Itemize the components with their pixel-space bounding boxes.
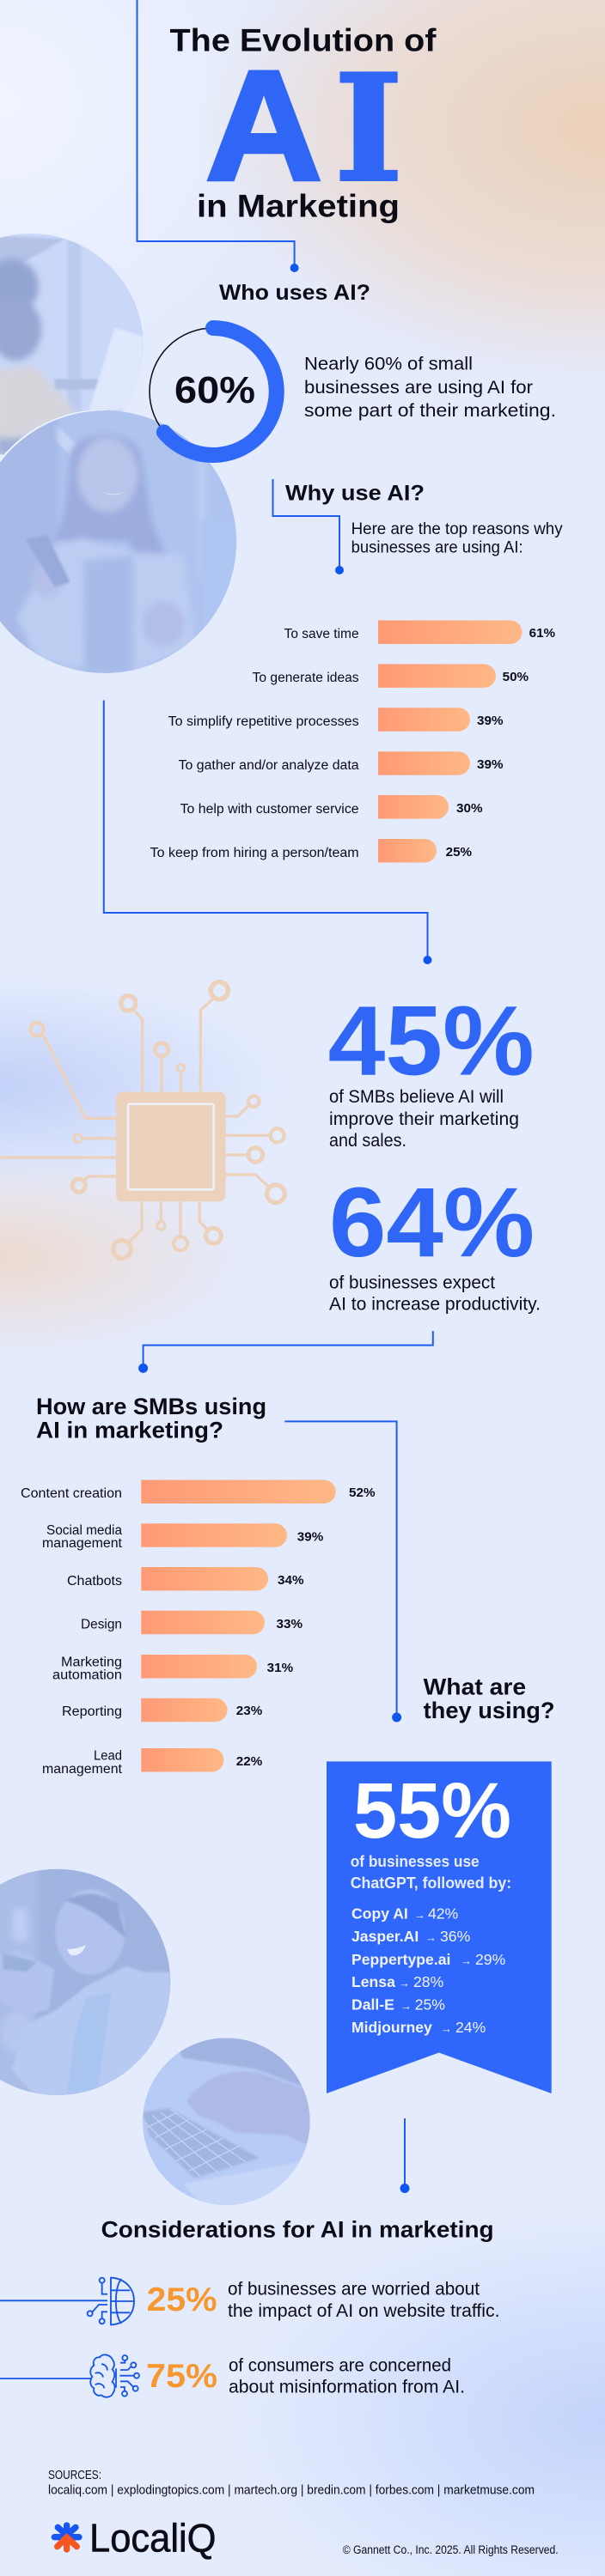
- sources: localiq.com | explodingtopics.com | martech.org | bredin.com | forbes.com | marketmuse.com: [48, 2483, 535, 2497]
- bar: chatbots: [67, 1567, 304, 1590]
- bar: gather data: To gather and/or analyze data: [179, 758, 359, 773]
- icon: brain circuit: [0, 2354, 139, 2397]
- section: how SMBs use AI: [21, 1394, 375, 1777]
- bar: social media: [42, 1523, 323, 1551]
- bar: gather data: [179, 751, 504, 775]
- heading: what are they using: [424, 1674, 555, 1723]
- tool list: →: [441, 2022, 452, 2035]
- sources: SOURCES:: [48, 2468, 101, 2482]
- bar: chatbots: 34%: [278, 1573, 304, 1588]
- logo: LocaliQ: [54, 2516, 217, 2561]
- bar: marketing automation: 31%: [267, 1661, 293, 1675]
- stat: 45%: 45%: [328, 986, 535, 1096]
- bar: generate ideas: 50%: [503, 670, 529, 684]
- intro text: businesses are using AI:: [351, 538, 523, 556]
- bar: lead management: Lead: [94, 1748, 122, 1764]
- description: of consumers are concerned: [229, 2354, 451, 2375]
- bar: customer service: To help with customer service: [180, 802, 359, 817]
- tool list: Copy AI: [351, 1905, 408, 1922]
- photo: hands on laptop: [143, 2038, 312, 2207]
- bar: reporting: 23%: [236, 1704, 262, 1718]
- bar: customer service: [180, 795, 483, 819]
- arrow: title connector: [138, 0, 299, 272]
- tool list: 29%: [475, 1951, 506, 1968]
- bar: simplify processes: 39%: [477, 714, 504, 728]
- intro text: Here are the top reasons why: [351, 519, 563, 538]
- tool list: 42%: [428, 1905, 459, 1922]
- tool list: 36%: [440, 1928, 471, 1945]
- heading: Who uses AI?: [219, 281, 370, 305]
- photo: woman at laptop: [0, 232, 144, 459]
- bar: social media: management: [42, 1536, 123, 1551]
- section: who uses AI: [150, 281, 556, 455]
- bar: hiring: To keep from hiring a person/team: [150, 846, 359, 860]
- description: [229, 2354, 465, 2397]
- tool list: →: [425, 1931, 437, 1944]
- stat: 45%: improve their marketing: [329, 1109, 519, 1129]
- stat: 64%: AI to increase productivity.: [329, 1293, 541, 1314]
- bar: lead management: 22%: [236, 1754, 262, 1769]
- heading: AI in marketing?: [36, 1417, 223, 1443]
- bar: generate ideas: [253, 664, 529, 688]
- icon: circuit chip: [0, 982, 284, 1258]
- photo: woman with phone: [0, 410, 258, 674]
- stat: 64%: of businesses expect: [329, 1273, 495, 1293]
- section: considerations: [0, 2217, 500, 2397]
- copyright: © Gannett Co., Inc. 2025. All Rights Reserved.: [343, 2543, 559, 2556]
- bar: lead management: [42, 1748, 262, 1777]
- tool list: 28%: [413, 1973, 444, 1990]
- stat description: of businesses use: [351, 1853, 480, 1870]
- tool list: Midjourney: [351, 2019, 432, 2036]
- stat 75%: 75%: [146, 2358, 217, 2395]
- icon: globe circuit: [0, 2278, 134, 2324]
- title line 1: The Evolution of: [170, 22, 437, 58]
- title line 3: in Marketing: [197, 189, 400, 223]
- bar: hiring: [150, 839, 472, 862]
- stat: 64%: 64%: [329, 1168, 535, 1278]
- description: businesses are using AI for: [304, 378, 533, 398]
- heading: How are SMBs using: [36, 1394, 266, 1419]
- bar: customer service: 30%: [456, 801, 483, 816]
- bar: hiring: 25%: [446, 845, 472, 860]
- bar: simplify processes: [168, 708, 504, 732]
- bar: generate ideas: To generate ideas: [253, 671, 359, 685]
- big AI letters: I: [334, 43, 403, 215]
- description: some part of their marketing.: [304, 401, 556, 421]
- title: [170, 22, 437, 223]
- photo: man on phone: [0, 1863, 170, 2098]
- big AI letters: A: [205, 38, 322, 213]
- bar: marketing automation: Marketing: [61, 1656, 122, 1669]
- bar: save time: [284, 620, 555, 644]
- stat: 45%: of SMBs believe AI will: [329, 1086, 504, 1107]
- arrow: connector to SMB usage: [138, 1331, 433, 1373]
- bar: reporting: Reporting: [62, 1704, 122, 1719]
- bar: chatbots: Chatbots: [67, 1574, 122, 1589]
- arrow: connector to what are they using: [284, 1421, 401, 1722]
- tool list: 25%: [415, 1996, 445, 2013]
- bar: gather data: 39%: [477, 757, 504, 772]
- bar: lead management: management: [42, 1762, 123, 1777]
- arrow: why use connector: [273, 479, 344, 574]
- stat: 45%: and sales.: [329, 1130, 406, 1151]
- description: of businesses are worried about: [228, 2279, 480, 2300]
- description: about misinformation from AI.: [229, 2377, 465, 2397]
- bar: content creation: [21, 1480, 375, 1504]
- arrow: connector to stats: [104, 701, 432, 964]
- section: why use AI: [150, 481, 563, 862]
- heading: Considerations for AI in marketing: [101, 2217, 494, 2243]
- heading: what are they using: What are: [424, 1674, 526, 1700]
- stat: 45%: [328, 986, 535, 1151]
- description: [304, 354, 556, 421]
- arrow: connector to considerations: [400, 2118, 409, 2193]
- stat description: ChatGPT, followed by:: [351, 1874, 511, 1892]
- tool list: [351, 1905, 506, 2036]
- tool list: →: [461, 1954, 472, 1967]
- row: misinformation: [0, 2354, 465, 2397]
- donut chart 60%: 60%: [174, 369, 255, 411]
- stat 25%: 25%: [147, 2281, 217, 2318]
- heading: Why use AI?: [285, 481, 425, 505]
- heading: [36, 1394, 266, 1443]
- bar: marketing automation: [52, 1655, 293, 1683]
- bar: design: 33%: [277, 1617, 302, 1631]
- bar: content creation: Content creation: [21, 1486, 122, 1501]
- tool list: 24%: [455, 2019, 486, 2036]
- tool list: Peppertype.ai: [351, 1951, 450, 1968]
- bar: simplify processes: To simplify repetitive processes: [168, 714, 359, 729]
- tool list: →: [399, 1977, 410, 1990]
- donut chart 60%: [150, 328, 277, 455]
- description: the impact of AI on website traffic.: [228, 2300, 500, 2321]
- bar chart: top reasons: [150, 620, 555, 862]
- intro text: [351, 519, 563, 556]
- bar: reporting: [62, 1698, 262, 1722]
- tool list: Jasper.AI: [351, 1928, 419, 1945]
- tool list: →: [414, 1908, 425, 1921]
- bar chart: SMB usage: [21, 1480, 375, 1777]
- logo mark: [54, 2525, 79, 2549]
- bar: design: [81, 1611, 302, 1634]
- bar: social media: 39%: [297, 1530, 323, 1544]
- photo content: [0, 410, 258, 674]
- description: Nearly 60% of small: [304, 354, 473, 374]
- row: website traffic: [0, 2278, 500, 2324]
- logo text: LocaliQ: [89, 2516, 217, 2561]
- stat description: [351, 1853, 511, 1892]
- heading: what are they using: they using?: [424, 1698, 555, 1723]
- panel: ChatGPT stats ribbon: [327, 1761, 552, 2093]
- big AI letters: [205, 38, 403, 215]
- bar: save time: To save time: [284, 627, 359, 641]
- sources: [48, 2468, 535, 2497]
- description: [228, 2279, 500, 2321]
- big stat 55%: 55%: [353, 1767, 511, 1855]
- bar: social media: Social media: [46, 1523, 122, 1538]
- tool list: Dall-E: [351, 1996, 394, 2013]
- tool list: Lensa: [351, 1973, 395, 1990]
- tool list: →: [400, 1999, 412, 2012]
- bar: save time: 61%: [529, 626, 555, 641]
- bar: marketing automation: automation: [52, 1668, 122, 1683]
- bar: design: Design: [81, 1618, 122, 1631]
- bar: content creation: 52%: [349, 1485, 375, 1500]
